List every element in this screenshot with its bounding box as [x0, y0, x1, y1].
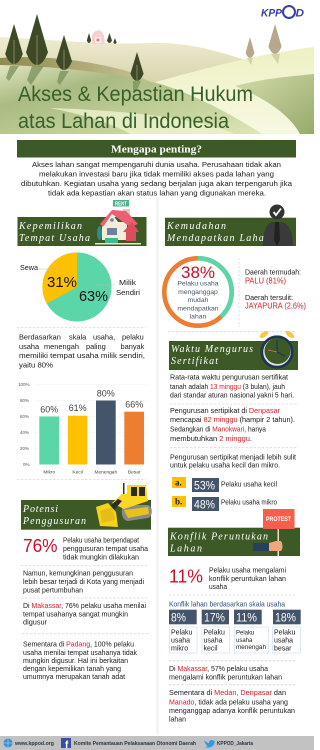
column divider: [156, 197, 158, 735]
bar chart: 20%: [20, 446, 29, 451]
pie chart: [20, 252, 140, 322]
banner: Sertifikat: [171, 356, 218, 367]
icon: bulldozer: [96, 483, 152, 527]
stat: 53% kecil: Pelaku usaha kecil: [221, 480, 277, 489]
donut chart: 38%: menganggap: [178, 289, 218, 296]
stat: 11%: 11%: [169, 567, 203, 587]
text: kota: lebih besar terjadi di Kota yang menjadi: [23, 577, 144, 586]
heading: Mengapa penting: [17, 140, 296, 158]
stat: 53% kecil: a.: [175, 478, 182, 488]
text: Makassar: [23, 601, 146, 626]
distant house: [92, 30, 105, 44]
stat: besar 18%: usaha: [274, 638, 293, 644]
intro text: tidak ada kepastian akan status lahan yang digunakan mereka.: [48, 188, 266, 198]
stat: 76%: tidak mungkin dilakukan: [63, 552, 139, 562]
text: skala usaha: Berdasarkan: [19, 332, 61, 342]
text: Medan Denpasar Manado: Manado, tidak ada pelaku usaha yang: [169, 698, 288, 706]
stat: besar 18%: [272, 610, 301, 653]
banner: [168, 528, 300, 556]
banner: Mendapatkan Lahan: [166, 233, 270, 244]
banner: [18, 217, 146, 246]
icon: house for rent: RENT: [115, 201, 127, 207]
text: skala usaha: paling: [86, 342, 106, 351]
stat: 76%: Pelaku usaha berpendapat: [63, 536, 139, 544]
text: skala usaha: pelaku: [122, 332, 144, 342]
panel: konflik peruntukan lahan: [168, 509, 301, 724]
donut chart: 38%: lahan: [190, 314, 207, 321]
panel: kemudahan mendapatkan lahan: [164, 204, 306, 332]
banner: [21, 500, 151, 530]
text: Padang: mungkin digusur. Hal ini berkaitan: [23, 656, 128, 665]
text: Makassar 57%: [169, 664, 282, 682]
text: 13 minggu: tanah adalah 13 minggu (3 bulan), jauh: [170, 382, 285, 391]
pie chart: Sendiri: [116, 288, 140, 297]
panel: waktu mengurus sertifikat: [169, 330, 298, 512]
donut chart: 38%: mendapatkan: [177, 306, 219, 313]
stat: 76%: 76%: [23, 536, 58, 556]
trunks: [14, 35, 137, 82]
trees: [5, 14, 144, 81]
header landscape illustration: [0, 14, 314, 134]
text: Padang: Sementara di Padang, 100% pelaku: [23, 640, 134, 648]
stat: menengah 11%: Pelaku: [236, 630, 254, 636]
stat: 11%: [169, 566, 286, 591]
text: kota: pusat pertumbuhan: [23, 586, 83, 594]
text: skala usaha: memiliki tempat usaha milik sendiri,: [19, 351, 145, 360]
text: Medan Denpasar Manado: menganggap adanya konflik peruntukan: [169, 706, 295, 715]
text: Makassar 57%: Di Makassar, 57% pelaku usaha: [169, 664, 269, 673]
stat: kecil 17%: kecil: [204, 646, 218, 652]
stat: 53% kecil: 53%: [194, 480, 215, 492]
stat: kecil 17%: usaha: [204, 638, 223, 644]
stat: besar 18%: besar: [274, 646, 292, 652]
banner: Kepemilikan: [18, 221, 82, 232]
stat: menengah 11%: usaha: [236, 638, 253, 644]
intro text: [21, 160, 293, 198]
banner: [169, 341, 298, 370]
stat: 11%: usaha: [209, 582, 228, 591]
text: skala usaha: menengah: [44, 342, 79, 351]
icon: person with check: [263, 204, 293, 246]
text: skala usaha: usaha,: [93, 332, 115, 342]
stat: mikro 8%: 8%: [171, 612, 186, 624]
text: daerah termudah dan tersulit: JAYAPURA (2,6%): [245, 302, 306, 310]
banner: Potensi: [22, 504, 58, 515]
text: daerah termudah dan tersulit: Daerah termudah:: [245, 268, 301, 277]
stat: 76%: penggusuran tempat usaha: [63, 544, 149, 553]
bar chart: Besar: [128, 470, 141, 476]
icon: globe: [4, 738, 12, 748]
bar chart: 100%: [18, 382, 30, 387]
text: Makassar: tempat usahanya sangat mungkin: [23, 610, 128, 618]
icon: protest sign: PROTEST: [266, 517, 291, 523]
text: skala usaha: [19, 332, 145, 370]
bar chart: 80%: [97, 388, 115, 398]
title: atas Lahan di Indonesia: [18, 110, 229, 133]
text: kecil dan mikro: untuk pelaku usaha kecil dan mikro.: [170, 460, 280, 470]
bar chart: 60%: [40, 404, 58, 414]
stat: menengah 11%: 11%: [236, 612, 257, 624]
icon: facebook: [61, 738, 71, 750]
pie chart: Milik: [119, 278, 136, 287]
text: Makassar: Di Makassar, 76% pelaku usaha menilai: [23, 601, 146, 610]
donut chart: 38%: 38%: [181, 263, 215, 282]
bar chart: 80%: [20, 398, 29, 403]
bar chart: 61%: [69, 403, 87, 413]
stat: 76%: [23, 536, 149, 562]
stat: 11%: konflik peruntukan lahan: [209, 574, 286, 583]
text: daerah termudah dan tersulit: [245, 268, 306, 310]
icon: twitter: [204, 740, 215, 748]
stat: mikro 8%: mikro: [171, 646, 188, 652]
text: Makassar 57%: mengalami konflik peruntukan lahan: [169, 672, 282, 682]
bar chart: 40%: [20, 430, 29, 435]
text: skala usaha: banyak: [120, 342, 145, 351]
stat: 48% mikro: [172, 496, 277, 512]
footer: [0, 736, 314, 750]
tree shadows: [6, 54, 280, 92]
text: Denpasar dan Manokwari: membutuhkan 2 minggu.: [170, 434, 252, 443]
banner: Penggusuran: [22, 516, 86, 527]
stat: kecil 17%: Pelaku: [204, 630, 225, 636]
panel: kepemilikan tempat usaha: [17, 200, 147, 480]
text: Padang: usaha menilai tempat usahanya tidak: [23, 648, 137, 657]
text: kecil dan mikro: Pengurusan sertipikat menjadi lebih sulit: [170, 452, 296, 462]
icon: house for rent: [95, 200, 141, 244]
text: Padang: dengan kepemilikan tanah yang: [23, 664, 121, 673]
intro text: melakukan investasi baru jika tidak memiliki akses pada lahan yang: [39, 170, 274, 178]
footer: Komite Pemantauan Pelaksanaan Otonomi Daerah: [74, 741, 197, 747]
bar chart: 66%: [125, 400, 143, 410]
text: Medan Denpasar Manado: Sementara di Medan, Denpasar dan: [169, 688, 286, 697]
banner: Konflik Peruntukan: [169, 532, 268, 543]
title: [18, 83, 253, 133]
stat: menengah 11%: [234, 610, 268, 653]
text: Denpasar dan Manokwari: Pengurusan sertipikat di Denpasar: [170, 406, 281, 415]
text: daerah termudah dan tersulit: Daerah tersulit:: [245, 293, 293, 302]
footer: KPPOD_Jakarta: [217, 741, 254, 747]
banner: Lahan: [169, 544, 202, 555]
text: daerah termudah dan tersulit: PALU (81%): [245, 276, 286, 286]
footer: www.kppod.org: [14, 741, 54, 747]
stat: mikro 8%: [169, 610, 197, 653]
donut chart: 38%: [164, 258, 232, 326]
stat: menengah 11%: menengah: [236, 645, 266, 651]
text: Padang: [23, 640, 137, 681]
bar chart: 0%: [23, 462, 30, 467]
text: kota: [23, 568, 144, 594]
bar chart: Kecil: [72, 470, 83, 476]
banner: Waktu Mengurus: [171, 344, 253, 355]
logo: KPPOD: [261, 6, 304, 20]
icon: alarm clock: [258, 330, 296, 367]
pale trees: [246, 24, 282, 58]
text: 13 minggu: [170, 372, 294, 400]
pie chart: 31%: [47, 274, 77, 291]
banner: [165, 218, 296, 246]
bar chart: 60%: [20, 414, 29, 419]
text: Makassar: digusur: [23, 618, 48, 626]
stat: mikro 8%: usaha: [171, 638, 190, 644]
banner: Kemudahan: [166, 221, 226, 232]
stat: mikro 8%: Pelaku: [171, 630, 193, 636]
panel: potensi penggusuran: [21, 483, 152, 681]
text: skala usaha: skala: [69, 332, 87, 342]
icon: protest sign: [253, 509, 294, 556]
intro text: dibutuhkan. Kegiatan usaha yang sedang berjalan juga akan terpengaruh jika: [21, 179, 293, 188]
stat: besar 18%: Pelaku: [274, 630, 296, 636]
text: Denpasar dan Manokwari: Sedangkan di Manokwari, hanya: [170, 424, 267, 434]
banner: Tempat Usaha: [19, 233, 90, 244]
bar chart: Menengah: [94, 470, 117, 476]
logo: KPPOD: KPP: [261, 8, 283, 20]
stat: kecil 17%: 17%: [204, 612, 225, 624]
text: kecil dan mikro: [170, 452, 296, 470]
text: 13 minggu: Rata-rata waktu pengurusan sertifikat: [170, 372, 288, 382]
stat: 53% kecil: [172, 477, 277, 492]
title: Akses & Kepastian Hukum: [18, 83, 253, 106]
heading: Mengapa penting: Mengapa penting?: [111, 144, 202, 156]
text: Medan Denpasar Manado: lahan: [169, 714, 186, 724]
intro text: Akses lahan sangat mempengaruhi dunia usaha. Perusahaan tidak akan: [32, 160, 281, 169]
pie chart: 63%: [79, 288, 108, 305]
pie chart: Sewa: [20, 263, 39, 272]
donut chart: 38%: Pelaku usaha: [177, 281, 219, 288]
stat: 48% mikro: 48%: [194, 500, 215, 512]
heading: konflik per skala usaha: Konflik lahan berdasarkan skala usaha: [169, 600, 286, 608]
text: Denpasar dan Manokwari: mencapai 82 minggu (hampir 2 tahun).: [170, 415, 295, 424]
text: Padang: umumnya merupakan tanah adat: [23, 672, 125, 681]
bar chart: Mikro: [43, 470, 55, 476]
text: Medan Denpasar Manado: [169, 688, 295, 724]
donut chart: 38%: mudah: [188, 297, 209, 304]
stat: 48% mikro: Pelaku usaha mikro: [221, 498, 277, 507]
stat: 48% mikro: b.: [175, 496, 182, 506]
text: 13 minggu: dari standar aturan nasional yakni 5 hari.: [170, 390, 294, 400]
text: Denpasar dan Manokwari: [170, 406, 295, 443]
stat: 11%: Pelaku usaha mengalami: [209, 566, 286, 574]
text: kota: Namun, kemungkinan penggusuran: [23, 568, 133, 578]
bar chart: [18, 382, 147, 476]
stat: besar 18%: 18%: [275, 612, 296, 624]
logo: KPPOD: D: [296, 8, 304, 20]
stat: kecil 17%: [202, 610, 230, 653]
text: skala usaha: usaha: [19, 342, 40, 351]
text: skala usaha: yaitu 80%: [19, 360, 53, 370]
